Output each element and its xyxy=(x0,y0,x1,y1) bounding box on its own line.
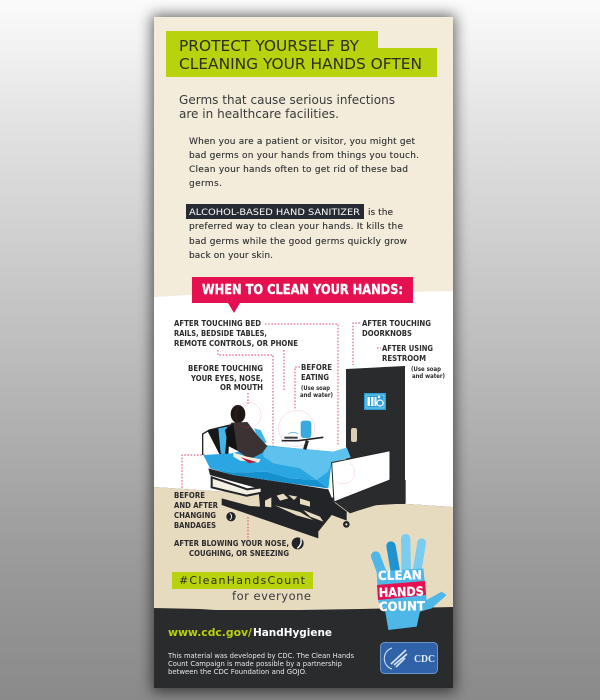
sanitizer body text: bad germs while the good germs quickly grow xyxy=(189,237,407,247)
index finger xyxy=(417,543,422,573)
footer credit text xyxy=(167,652,354,676)
cream upper background xyxy=(154,17,453,297)
label: bandages: BANDAGES xyxy=(174,521,216,530)
sanitizer label xyxy=(186,204,364,219)
cdc wordmark: CDC xyxy=(414,654,435,665)
label: doorknobs: DOORKNOBS xyxy=(362,329,412,338)
website url: www.cdc.gov/ xyxy=(168,627,252,639)
door shadow behind footboard xyxy=(330,480,406,513)
sanitizer body text: back on your skin. xyxy=(189,251,273,261)
label: touching eyes: BEFORE TOUCHING xyxy=(188,364,263,373)
dark footer band xyxy=(154,607,453,688)
subheading: are in healthcare facilities. xyxy=(179,107,339,121)
label: blowing nose xyxy=(174,539,289,558)
sanitizer label text: ALCOHOL-BASED HAND SANITIZER xyxy=(189,208,360,218)
connector lines xyxy=(182,323,381,540)
footboard xyxy=(332,451,390,502)
middle finger xyxy=(392,539,420,573)
dotted circles xyxy=(236,402,355,484)
palm, thumb and cuff xyxy=(377,568,447,630)
ring finger xyxy=(391,546,396,573)
label: restroom: and water) xyxy=(412,372,445,380)
label: doorknobs: AFTER TOUCHING xyxy=(362,319,431,328)
paragraph: germs on hands: Clean your hands often to get rid of these bad xyxy=(189,165,408,175)
sanitizer body text: is the xyxy=(368,208,393,218)
label: bed rails xyxy=(174,319,298,348)
title line 2: CLEANING YOUR HANDS OFTEN xyxy=(179,55,422,73)
paragraph: germs on hands: bad germs on your hands from things you touch. xyxy=(189,151,419,161)
subheading: Germs that cause serious infections xyxy=(179,93,395,107)
pink band xyxy=(377,581,426,600)
clean: CLEAN xyxy=(378,567,422,583)
blue back cushion xyxy=(218,427,267,455)
label: touching eyes: YOUR EYES, NOSE, xyxy=(190,374,263,383)
black head pillow xyxy=(207,425,230,456)
label: blowing nose: COUGHING, OR SNEEZING xyxy=(189,549,289,558)
for everyone: for everyone xyxy=(232,589,311,603)
blanket and mattress xyxy=(203,445,351,488)
bed wheels xyxy=(226,512,350,549)
label: doorknobs xyxy=(362,319,431,338)
bedside table xyxy=(282,432,323,449)
count: COUNT xyxy=(379,598,425,614)
paragraph: germs on hands xyxy=(189,137,419,189)
hhs emblem xyxy=(384,648,407,669)
paragraph: germs on hands: When you are a patient or visitor, you might get xyxy=(189,137,415,147)
label: bandages xyxy=(174,491,218,530)
door xyxy=(346,366,405,513)
hashtag highlight xyxy=(172,572,313,589)
title xyxy=(166,31,437,77)
footer credit text: This material was developed by CDC. The Clean Hands xyxy=(167,652,354,660)
label: restroom: (Use soap xyxy=(411,365,441,373)
restroom sign xyxy=(364,393,386,410)
hand logo: clean hands count xyxy=(376,539,447,630)
website url: HandHygiene xyxy=(253,627,332,639)
sanitizer body text xyxy=(189,208,407,261)
label: bandages: CHANGING xyxy=(174,511,216,520)
label: bed rails: RAILS, BEDSIDE TABLES, xyxy=(174,329,267,338)
title line 1: PROTECT YOURSELF BY xyxy=(179,37,360,55)
label: blowing nose: AFTER BLOWING YOUR NOSE, xyxy=(174,539,289,548)
soap bottle xyxy=(301,421,311,438)
poster panel xyxy=(154,17,453,688)
label: bed rails: AFTER TOUCHING BED xyxy=(174,319,261,328)
label: touching eyes: OR MOUTH xyxy=(220,383,263,392)
hand artwork xyxy=(376,539,447,630)
label: restroom xyxy=(382,344,445,380)
footer credit text: between the CDC Foundation and GOJO. xyxy=(168,668,307,676)
title highlight xyxy=(166,31,437,77)
hands: HANDS xyxy=(379,583,424,600)
label: before eating: BEFORE xyxy=(301,363,332,372)
paragraph: hand sanitizer xyxy=(186,204,407,261)
white illustration background xyxy=(154,291,453,507)
tan floor background xyxy=(154,487,453,610)
bed frame xyxy=(208,468,347,538)
head rail xyxy=(203,425,232,455)
banner: when to clean your hands: WHEN TO CLEAN YOUR HANDS: xyxy=(202,282,403,298)
cdc logo xyxy=(380,642,438,674)
website url xyxy=(168,627,332,639)
banner: when to clean your hands xyxy=(192,277,413,313)
label: before eating: and water) xyxy=(300,391,333,399)
paragraph: germs on hands: germs. xyxy=(189,179,222,189)
label: before eating: (Use soap xyxy=(301,384,330,392)
door handle xyxy=(351,428,357,442)
sanitizer body text: preferred way to clean your hands. It kills the xyxy=(189,222,403,232)
label: bandages: AND AFTER xyxy=(174,501,218,510)
hashtag xyxy=(172,572,313,603)
hashtag text: #CleanHandsCount xyxy=(179,574,306,587)
label: before eating xyxy=(300,363,333,399)
label: bandages: BEFORE xyxy=(174,491,205,500)
subheading xyxy=(179,93,395,121)
label: bed rails: REMOTE CONTROLS, OR PHONE xyxy=(174,339,298,348)
label: restroom: AFTER USING xyxy=(382,344,433,353)
footer credit text: Count Campaign is made possible by a partnership xyxy=(168,660,343,668)
logo badge xyxy=(380,642,438,674)
patient xyxy=(225,405,267,463)
hospital bed and patient illustration xyxy=(203,402,406,549)
panel shadow xyxy=(152,15,455,692)
label: restroom: RESTROOM xyxy=(382,354,426,363)
label: touching eyes xyxy=(188,364,263,392)
pinky finger xyxy=(376,556,383,577)
label: before eating: EATING xyxy=(301,373,329,382)
